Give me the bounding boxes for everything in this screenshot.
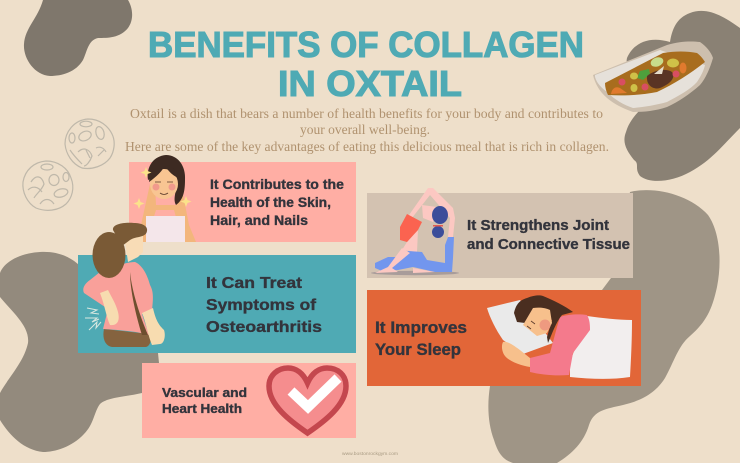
- label: Health of the Skin,: [210, 195, 331, 210]
- title: IN OXTAIL: [278, 63, 462, 104]
- label: It Improves: [375, 319, 467, 337]
- illustration: yoga pose: [371, 188, 459, 275]
- title: [148, 24, 584, 104]
- label: [210, 177, 345, 228]
- label: Heart Health: [162, 402, 242, 416]
- icon: collagen circle upper: [65, 119, 114, 169]
- panel: sleep: [367, 290, 641, 386]
- illustration: woman touching face: [134, 155, 196, 242]
- illustration: woman sleeping: [487, 295, 632, 379]
- footer url: www.bostonrockgym.com: [342, 451, 398, 456]
- panel: osteoarthritis: [78, 223, 356, 353]
- panel: skin, hair and nails: [129, 155, 356, 242]
- intro text: Oxtail is a dish that bears a number of health benefits for your body and contributes to: [130, 106, 603, 121]
- label: Symptoms of: [206, 297, 317, 314]
- title: BENEFITS OF COLLAGEN: [148, 24, 584, 65]
- label: [162, 386, 247, 416]
- label: It Strengthens Joint: [467, 218, 609, 234]
- label: Hair, and Nails: [210, 213, 308, 228]
- icon: heart with check: [269, 368, 346, 433]
- blob: top right: [624, 11, 740, 181]
- intro text: [125, 106, 609, 154]
- intro text: your overall well-being.: [300, 122, 430, 137]
- panel: vascular and heart health: [142, 363, 356, 438]
- label: and Connective Tissue: [467, 237, 630, 253]
- label: It Can Treat: [206, 275, 303, 292]
- blob: top left: [24, 0, 132, 76]
- label: [375, 319, 467, 359]
- icon: oxtail soup bowl: [593, 41, 713, 112]
- icon: collagen circle lower: [23, 161, 73, 210]
- intro text: Here are some of the key advantages of eating this delicious meal that is rich in collagen.: [125, 139, 609, 154]
- panel: joint and connective tissue: [367, 188, 633, 278]
- blob: lower left: [0, 252, 159, 452]
- illustration: woman holding lower back: [83, 223, 165, 347]
- label: [467, 218, 630, 253]
- label: It Contributes to the: [210, 177, 345, 192]
- blob: lower right: [488, 190, 720, 463]
- label: [206, 275, 322, 336]
- label: Osteoarthritis: [206, 319, 322, 336]
- label: Vascular and: [162, 386, 247, 400]
- label: Your Sleep: [375, 341, 461, 359]
